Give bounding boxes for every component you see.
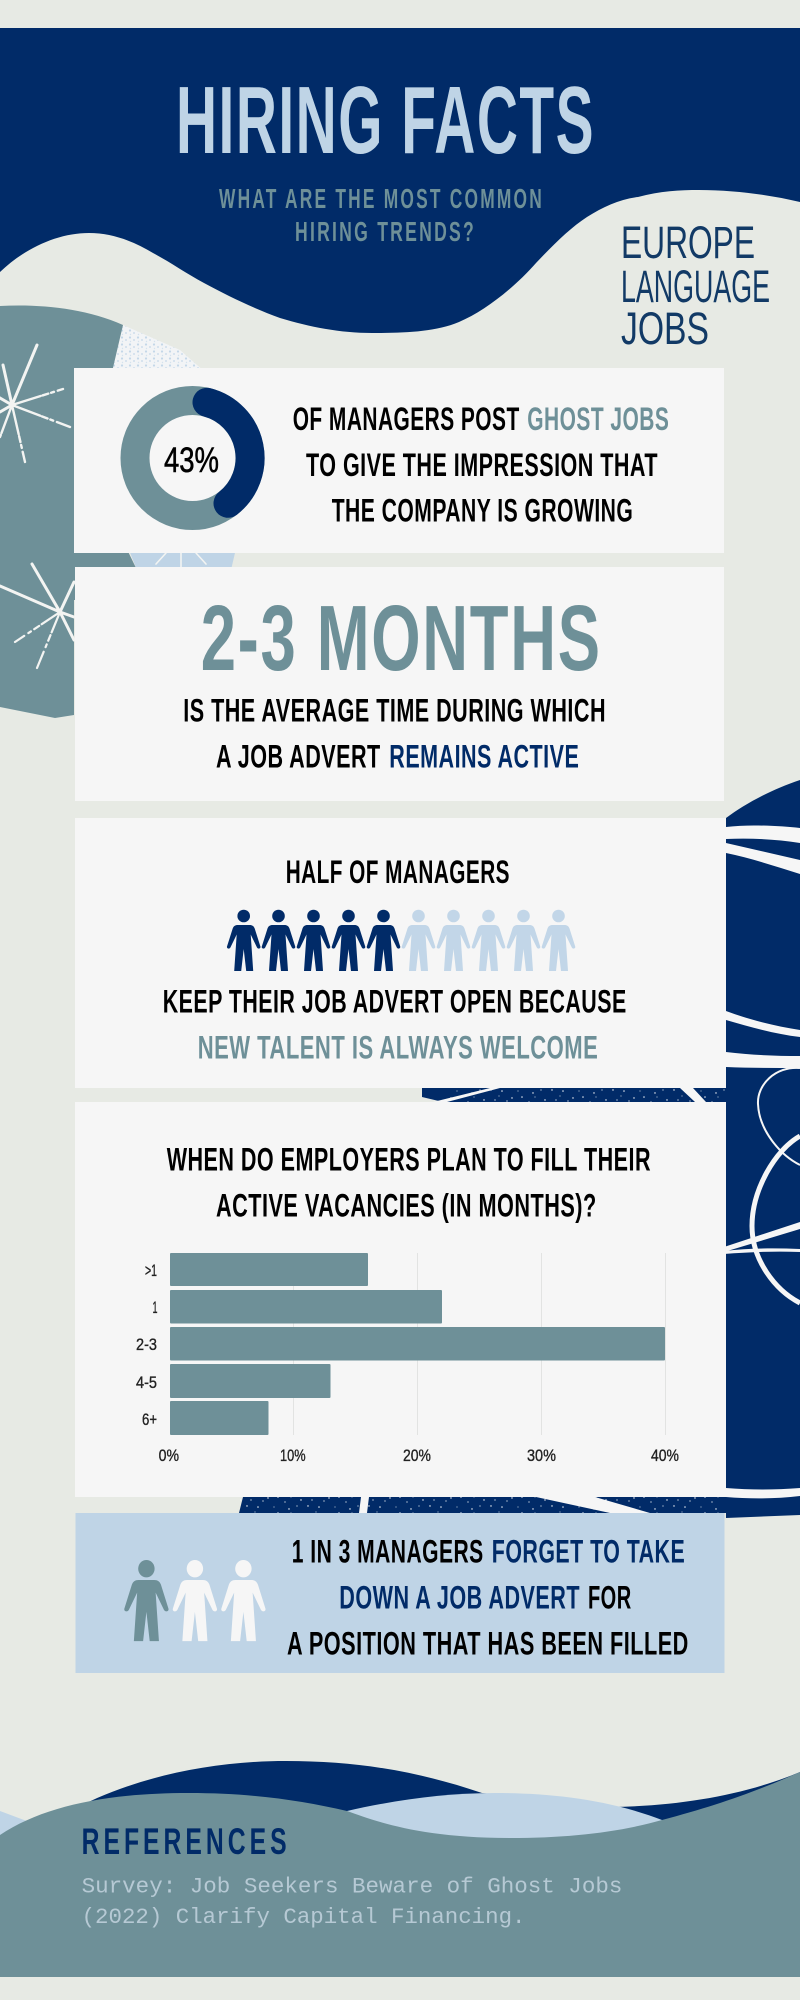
- chart heading: [167, 1142, 651, 1224]
- pictogram: ten people, five highlighted: [227, 910, 575, 971]
- bar chart: 6+: [142, 1410, 157, 1429]
- duration statement: A JOB ADVERT: [216, 738, 381, 774]
- donut chart 43%: 43%: [164, 441, 219, 480]
- talent statement: NEW TALENT IS ALWAYS WELCOME: [198, 1029, 598, 1065]
- references text: Survey: Job Seekers Beware of Ghost Jobs: [82, 1875, 622, 1900]
- headline stat 2-3 months: 2-3 MONTHS: [201, 586, 602, 690]
- donut chart 43%: [135, 400, 250, 516]
- footer waves: [0, 1761, 800, 1977]
- forgetful managers statement: FORGET TO TAKE: [492, 1534, 685, 1570]
- bar chart: 40%: [651, 1446, 679, 1465]
- references text: (2022) Clarify Capital Financing.: [82, 1905, 525, 1930]
- logo: Europe Language Jobs: [621, 217, 770, 354]
- bar chart: 1: [152, 1298, 158, 1317]
- bar chart: 10%: [280, 1446, 306, 1465]
- bar chart: >1: [145, 1261, 157, 1280]
- bar chart: 20%: [403, 1446, 431, 1465]
- duration statement: IS THE AVERAGE TIME DURING WHICH: [183, 693, 606, 729]
- ghost jobs statement: OF MANAGERS POST: [293, 401, 520, 437]
- subtitle: WHAT ARE THE MOST COMMON: [219, 183, 544, 214]
- card heading: HALF OF MANAGERS: [286, 854, 510, 890]
- logo: Europe Language Jobs: JOBS: [621, 303, 709, 354]
- bar chart: 4-5: [136, 1373, 157, 1392]
- ghost jobs statement: GHOST JOBS: [527, 401, 669, 437]
- left decorative blob with stars: [0, 306, 238, 718]
- talent statement: [163, 984, 627, 1065]
- pictogram: one in three people: [124, 1560, 266, 1641]
- duration statement: REMAINS ACTIVE: [389, 738, 579, 774]
- card 5: 1 in 3 managers: [76, 1513, 724, 1673]
- chart heading: ACTIVE VACANCIES (IN MONTHS)?: [216, 1188, 597, 1224]
- card 3: half of managers: [75, 818, 726, 1088]
- forgetful managers statement: 1 IN 3 MANAGERS: [292, 1534, 484, 1570]
- forgetful managers statement: FOR: [588, 1580, 632, 1616]
- forgetful managers statement: DOWN A JOB ADVERT: [339, 1580, 580, 1616]
- references heading: REFERENCES: [82, 1821, 291, 1862]
- right decorative navy blob with white strokes: [239, 780, 800, 1518]
- bar chart: 30%: [527, 1446, 556, 1465]
- subtitle: HIRING TRENDS?: [295, 216, 476, 247]
- card 4: vacancy chart: [75, 1102, 726, 1497]
- card 2: job advert duration: [75, 567, 724, 801]
- duration statement: [183, 693, 606, 774]
- bar chart: 0%: [159, 1446, 179, 1465]
- header wave: [0, 28, 800, 333]
- ghost jobs statement: THE COMPANY IS GROWING: [332, 493, 633, 529]
- forgetful managers statement: [287, 1534, 689, 1662]
- references text: [82, 1875, 622, 1930]
- subtitle: [219, 183, 544, 247]
- bar chart: 2-3: [136, 1335, 157, 1354]
- bar chart: [136, 1253, 679, 1465]
- ghost jobs statement: [293, 401, 669, 529]
- card 1: ghost jobs: [74, 368, 724, 553]
